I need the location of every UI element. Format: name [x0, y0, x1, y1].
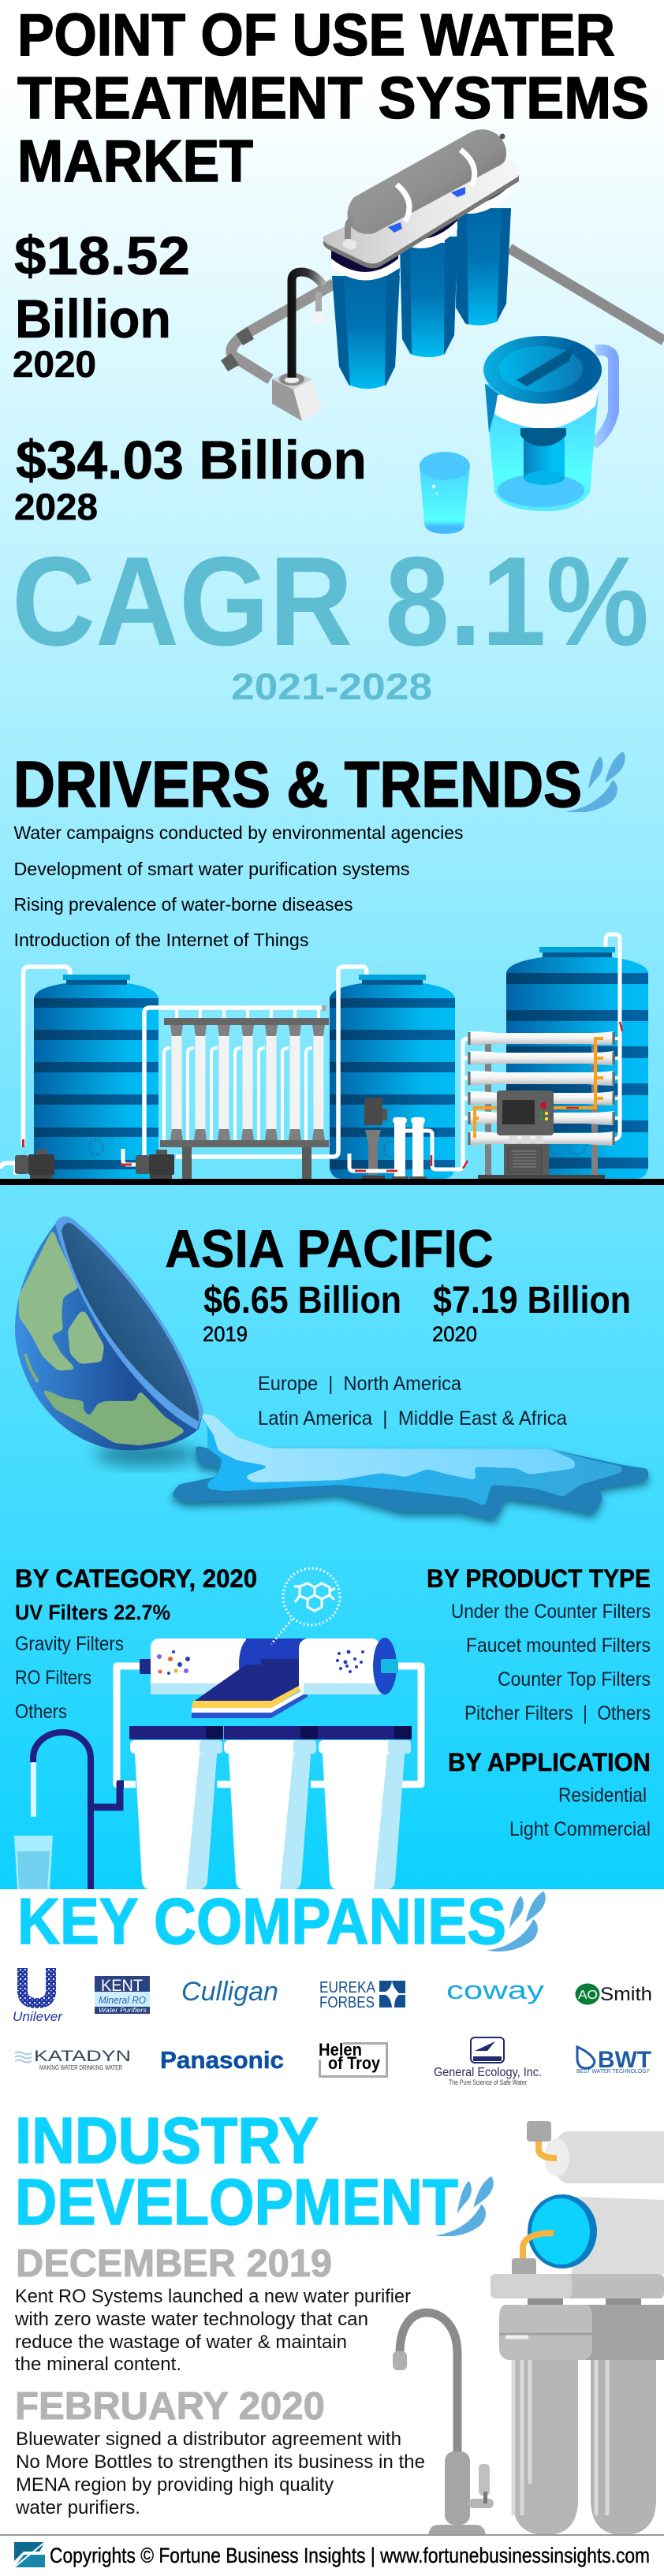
icon: water splash	[435, 2176, 494, 2236]
icon: molecule	[271, 1568, 340, 1644]
text block: water purifiers.	[15, 2497, 140, 2518]
logo: Unilever: Unilever	[13, 2009, 63, 2024]
logo: Coway: coway	[446, 1976, 544, 2004]
CAGR period: 2021-2028	[231, 665, 432, 707]
storage tank capsule	[348, 129, 506, 234]
logo: Culligan: Culligan	[181, 1977, 278, 2007]
drivers list	[14, 822, 464, 950]
text block: MENA region by providing high quality	[16, 2474, 334, 2496]
drivers list: Introduction of the Internet of Things	[14, 930, 309, 950]
title	[17, 2, 649, 194]
vertical pump and cartridge filters	[349, 1022, 622, 1180]
drivers list: Water campaigns conducted by environmental agencies	[14, 822, 464, 843]
heading: industry development: INDUSTRY	[15, 2104, 319, 2177]
logo: Eureka Forbes: FORBES	[319, 1994, 375, 2011]
heading: December 2019: DECEMBER 2019	[16, 2242, 332, 2285]
logo: General Ecology	[434, 2037, 542, 2086]
text block: Bluewater signed a distributor agreement with	[16, 2429, 401, 2450]
market size 2028: $34.03 Billion	[16, 430, 367, 490]
drivers list: Development of smart water purification systems	[14, 859, 410, 879]
drivers list: Rising prevalence of water-borne diseases	[14, 894, 353, 915]
heading: industry development: DEVELOPMENT	[15, 2165, 458, 2239]
product type list	[451, 1601, 651, 1724]
logo: Katadyn: KATADYN	[34, 2048, 131, 2065]
market size 2028: 2028	[14, 486, 98, 528]
text block: the mineral content.	[15, 2354, 181, 2375]
illustration: water pitcher	[483, 336, 614, 511]
leading segment: UV Filters 22.7%	[15, 1601, 170, 1624]
category list: Gravity Filters	[15, 1633, 124, 1655]
product type list: Faucet mounted Filters	[466, 1635, 651, 1657]
storage tank middle	[330, 975, 455, 1179]
heading: by application: BY APPLICATION	[448, 1748, 651, 1776]
title: MARKET	[17, 128, 253, 194]
illustration: filter system	[14, 1568, 421, 1889]
text block: reduce the wastage of water & maintain	[15, 2332, 347, 2353]
mounting plate	[323, 158, 519, 268]
logo: Helen of Troy: Helen	[319, 2040, 362, 2060]
pump centre	[136, 1150, 174, 1180]
panel: by product type	[427, 1564, 651, 1724]
heading: drivers and trends: DRIVERS & TRENDS	[13, 747, 582, 821]
heading: Asia Pacific: ASIA PACIFIC	[165, 1219, 494, 1279]
panel: by application	[448, 1748, 651, 1840]
illustration: water treatment plant	[0, 934, 664, 1185]
logo: Katadyn	[15, 2048, 131, 2071]
illustration: reverse osmosis unit	[221, 129, 664, 421]
value 2019: 2019	[203, 1322, 248, 1346]
heading: industry development	[15, 2104, 458, 2239]
panel: February 2020	[15, 2385, 425, 2518]
category list: Others	[15, 1701, 67, 1723]
logo: BWT: BWT	[598, 2047, 651, 2073]
icon: filtered particles	[336, 1650, 364, 1673]
logo: Unilever	[13, 1968, 63, 2024]
logo: Eureka Forbes: EUREKA	[319, 1979, 376, 1996]
text block: Kent RO Systems launched a new water purifier	[15, 2286, 411, 2307]
product type list: Counter Top Filters	[498, 1668, 651, 1691]
storage tank left	[24, 967, 159, 1179]
logo: Kent	[95, 1976, 150, 2014]
filter jars	[129, 1726, 412, 1889]
heading: key companies: KEY COMPANIES	[17, 1884, 506, 1958]
market size 2020: $18.52	[14, 226, 190, 286]
value 2020: $7.19 Billion	[433, 1280, 631, 1322]
logo: Helen of Troy: of Troy	[328, 2053, 381, 2073]
company logos	[13, 1968, 652, 2086]
icon: faucet and glass	[14, 1732, 124, 1889]
illustration: water spilling from globe	[15, 1217, 648, 1524]
value 2020	[432, 1280, 631, 1346]
illustration: grey faucet	[393, 2313, 490, 2535]
footer	[14, 2542, 650, 2567]
pump left	[15, 1150, 54, 1180]
globe	[15, 1217, 203, 1450]
market size 2028	[14, 430, 367, 528]
application list: Light Commercial	[509, 1818, 651, 1840]
title: POINT OF USE WATER	[17, 2, 615, 68]
panel: Asia Pacific	[15, 1217, 648, 1524]
application list	[509, 1784, 651, 1840]
icon: particles before filter	[157, 1650, 190, 1675]
other regions: Europe | North America	[258, 1373, 461, 1395]
panel: by category	[15, 1564, 257, 1723]
text block	[15, 2429, 425, 2518]
logo: Panasonic: Panasonic	[160, 2046, 284, 2074]
logo: General Ecology: The Pure Science of Safe Water	[449, 2078, 527, 2086]
market size 2020: 2020	[13, 343, 96, 385]
value 2019	[203, 1280, 401, 1346]
market size 2020	[13, 226, 190, 385]
application list: Residential	[558, 1784, 647, 1806]
heading: by category: BY CATEGORY, 2020	[15, 1564, 257, 1593]
category list	[15, 1633, 124, 1723]
heading: by product type: BY PRODUCT TYPE	[427, 1564, 651, 1593]
other regions	[258, 1373, 567, 1430]
logo: Kent: Water Purifiers	[99, 2007, 147, 2014]
logo: Fortune Business Insights	[14, 2542, 45, 2567]
text block	[14, 2286, 411, 2375]
category list: RO Filters	[15, 1667, 91, 1689]
icon: water splash	[487, 1891, 546, 1952]
reverse osmosis tube rack	[469, 1031, 620, 1180]
text block: with zero waste water technology that can	[14, 2309, 368, 2330]
logo: BWT: BEST WATER TECHNOLOGY	[576, 2069, 650, 2075]
logo: AO Smith	[576, 1984, 652, 2005]
logo: AO Smith: Smith	[600, 1984, 652, 2005]
filter cartridges	[331, 177, 513, 389]
heading: February 2020: FEBRUARY 2020	[15, 2385, 325, 2428]
logo: Katadyn: MAKING WATER DRINKING WATER	[39, 2064, 122, 2071]
illustration: grey water purifier	[491, 2121, 664, 2535]
illustration: glass of water	[416, 441, 473, 534]
market size 2020: Billion	[15, 289, 171, 349]
logo: General Ecology: General Ecology, Inc.	[434, 2066, 542, 2079]
logo: BWT	[576, 2047, 651, 2075]
logo: Kent: KENT	[101, 1977, 143, 1995]
title: TREATMENT SYSTEMS	[17, 65, 649, 131]
value 2019: $6.65 Billion	[203, 1280, 401, 1322]
logo: AO Smith: AO	[578, 1989, 598, 2002]
logo: Eureka Forbes	[319, 1979, 405, 2011]
text block: No More Bottles to strengthen its business in the	[16, 2451, 425, 2473]
logo: Kent: Mineral RO	[99, 1994, 146, 2006]
membrane filter rack	[160, 1009, 329, 1180]
panel: December 2019	[14, 2242, 411, 2375]
value 2020: 2020	[432, 1322, 477, 1346]
logo: Helen of Troy	[319, 2040, 386, 2077]
other regions: Latin America | Middle East & Africa	[258, 1407, 567, 1430]
icon: water splash	[565, 751, 625, 812]
storage tank right	[506, 947, 648, 1179]
